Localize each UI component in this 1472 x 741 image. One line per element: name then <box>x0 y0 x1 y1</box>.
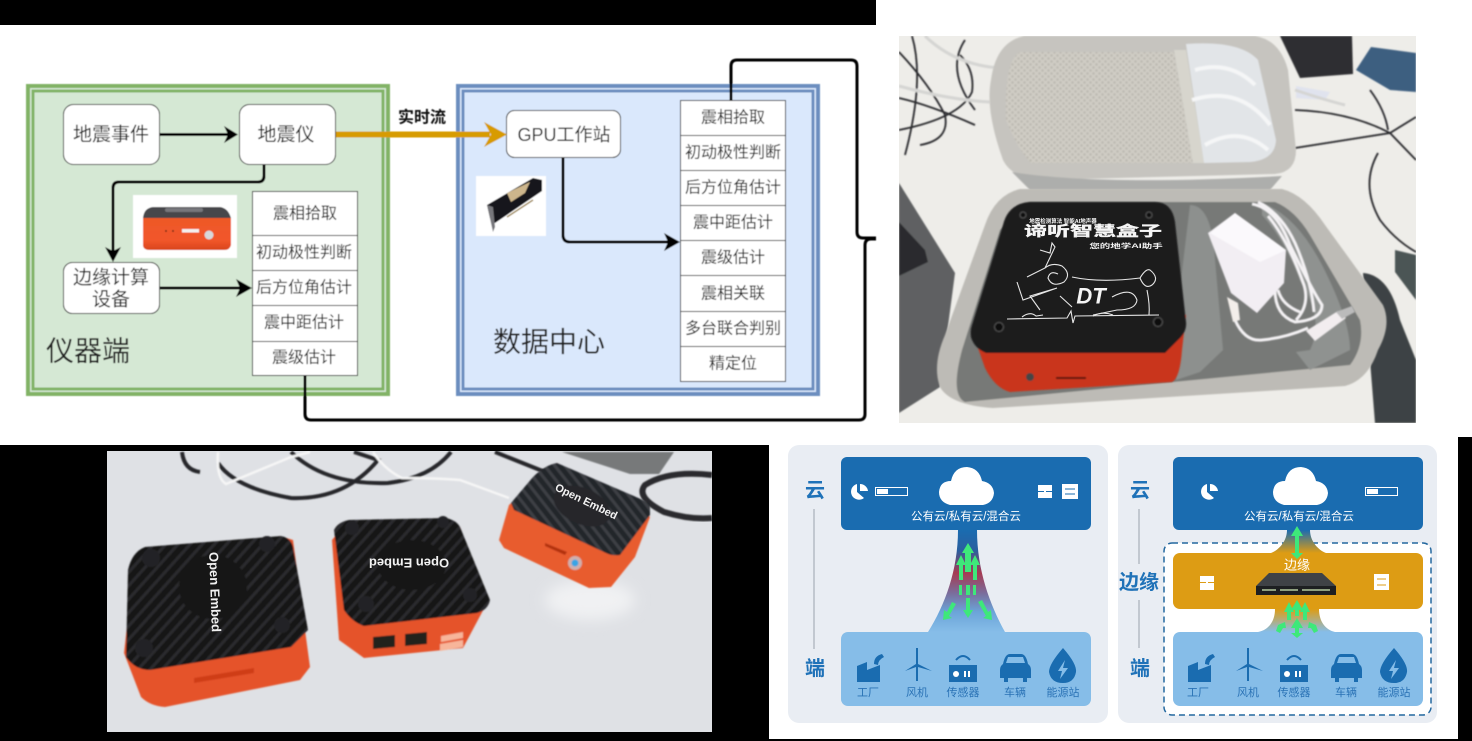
box 3 <box>499 463 650 588</box>
icon: switch <box>1062 484 1078 499</box>
green data arrows <box>1276 526 1318 638</box>
box 2 <box>332 516 490 658</box>
text: box branding <box>1024 217 1163 308</box>
panel background <box>1118 445 1437 723</box>
device labels: 车辆 <box>1335 685 1357 699</box>
box: seismometer <box>240 104 336 164</box>
box: edge computing device: 边缘计算 <box>73 266 149 288</box>
device labels: 能源站 <box>1046 685 1080 699</box>
panel: edge-cloud seismic workflow diagram <box>28 60 876 420</box>
icon: sensor <box>949 656 977 682</box>
table: data center tasks: 精定位 <box>709 354 757 372</box>
box: edge computing device: 设备 <box>92 288 130 310</box>
side labels <box>1119 480 1159 680</box>
device labels: 传感器 <box>1278 686 1310 699</box>
side labels: 端 <box>805 657 825 680</box>
table: edge tasks: 震相拾取 <box>273 204 337 222</box>
box: seismometer: 地震仪 <box>257 124 315 146</box>
icon: gears <box>1038 485 1052 498</box>
label: realtime stream: 实时流 <box>398 108 446 126</box>
text: box branding: 地震检测算法 智能AI地声器 <box>1029 217 1097 225</box>
table: edge tasks <box>252 192 358 376</box>
case lid <box>990 36 1296 190</box>
box 1 <box>124 536 310 707</box>
icon: cloud <box>939 467 994 505</box>
arrow: edge device to table <box>160 279 252 297</box>
icon: GPU card <box>476 176 546 236</box>
orange DT box <box>971 202 1186 392</box>
table: edge tasks: 后方位角估计 <box>256 278 352 296</box>
arrow: realtime stream <box>336 122 507 147</box>
device labels <box>857 685 1080 699</box>
icon: server <box>1365 487 1398 496</box>
text: box branding: DT <box>1076 284 1107 308</box>
table: edge tasks: 震级估计 <box>272 348 336 366</box>
text: box 2 logo: Open Embed <box>369 556 449 570</box>
icon: orange edge box <box>133 195 237 258</box>
connection cloud to edge <box>1271 530 1326 553</box>
side labels: 云 <box>805 480 825 502</box>
side labels <box>805 480 825 680</box>
photo: three OpenEmbed boxes <box>107 451 712 732</box>
text: box 1 logo: Open Embed <box>206 552 224 632</box>
device labels: 能源站 <box>1378 685 1410 699</box>
text: box 3 logo: Open Embed <box>553 482 619 522</box>
edge bar <box>1173 553 1423 609</box>
arrow: seismometer to edge device <box>105 165 264 262</box>
table: edge tasks: 震中距估计 <box>264 314 344 332</box>
text: box branding: 谛听智慧盒子 <box>1024 223 1162 240</box>
icon: energy drop <box>1380 648 1407 683</box>
icon: pie chart <box>851 484 868 500</box>
icon: energy drop <box>1049 648 1076 683</box>
panel: instrument side <box>28 86 388 394</box>
funnel connection <box>928 530 1005 632</box>
icon: pie chart <box>1201 484 1218 500</box>
top cloud bar <box>841 457 1091 530</box>
table: edge tasks: 初动极性判断 <box>256 244 352 262</box>
connection edge to device <box>1258 609 1335 632</box>
charger and white cable <box>1208 202 1355 341</box>
icon: factory <box>1188 654 1215 682</box>
edge dashed region <box>1164 543 1431 715</box>
table: data center tasks: 后方位角估计 <box>685 178 781 196</box>
device labels <box>1187 685 1410 699</box>
device labels: 风机 <box>906 685 928 699</box>
icon: wind turbine <box>905 648 932 681</box>
panel: data center <box>458 86 818 394</box>
device labels: 工厂 <box>1187 687 1209 699</box>
table: data center tasks: 初动极性判断 <box>685 144 781 162</box>
table: data center tasks: 震相关联 <box>701 284 765 302</box>
icon: car <box>1000 654 1031 682</box>
heading: instrument side: 仪器端 <box>46 336 130 366</box>
desk items behind the case <box>899 36 1416 423</box>
device labels: 车辆 <box>1004 685 1026 699</box>
device bar <box>841 632 1091 706</box>
box: edge computing device <box>64 262 160 314</box>
text: edge: 边缘 <box>1284 558 1310 572</box>
panel background <box>788 445 1108 723</box>
icon: gears <box>1200 576 1214 590</box>
arrow: edge output connector <box>305 239 876 420</box>
icon: sensor <box>1280 656 1308 682</box>
box: earthquake event <box>64 104 160 164</box>
cables <box>182 452 712 518</box>
heading: data center: 数据中心 <box>493 326 605 358</box>
box: GPU workstation <box>506 110 620 158</box>
icon: dragon line art <box>1007 243 1159 323</box>
box: earthquake event: 地震事件 <box>73 124 149 146</box>
text: cloud types: 公有云/私有云/混合云 <box>1244 509 1354 523</box>
panel: cloud-device architecture <box>788 445 1108 723</box>
icon: edge server <box>1256 573 1336 595</box>
icon: cloud <box>1273 467 1328 505</box>
photo: case with DT smart box <box>899 36 1416 423</box>
icon: factory <box>857 654 884 682</box>
table: data center tasks: 多台联合判别 <box>685 320 781 338</box>
side labels: 云 <box>1130 480 1150 502</box>
arrow: GPU workstation to table <box>563 158 680 251</box>
device labels: 传感器 <box>946 686 980 699</box>
table: data center tasks: 震级估计 <box>701 248 765 266</box>
panel: cloud-edge-device architecture <box>1118 445 1437 723</box>
side labels: 端 <box>1130 657 1150 680</box>
device labels: 风机 <box>1237 685 1259 699</box>
icon: server <box>875 487 908 496</box>
table: data center tasks <box>680 100 786 382</box>
top cloud bar <box>1173 457 1423 530</box>
icon: wind turbine <box>1236 648 1263 681</box>
side labels: 边缘 <box>1119 571 1159 594</box>
case bottom <box>937 189 1387 408</box>
table: data center tasks: 震相拾取 <box>701 108 765 126</box>
icon: switch <box>1374 574 1389 590</box>
device bar <box>1173 526 1423 706</box>
text: box branding: 您的地学AI助手 <box>1089 242 1163 250</box>
text: cloud types: 公有云/私有云/混合云 <box>911 509 1021 523</box>
icon: car <box>1331 654 1362 682</box>
device labels: 工厂 <box>857 687 879 699</box>
table: data center tasks: 震中距估计 <box>693 214 773 232</box>
box: GPU workstation: GPU工作站 <box>517 125 611 145</box>
arrow: event to seismometer <box>160 126 238 143</box>
arrow: data center upward connector <box>731 60 876 238</box>
